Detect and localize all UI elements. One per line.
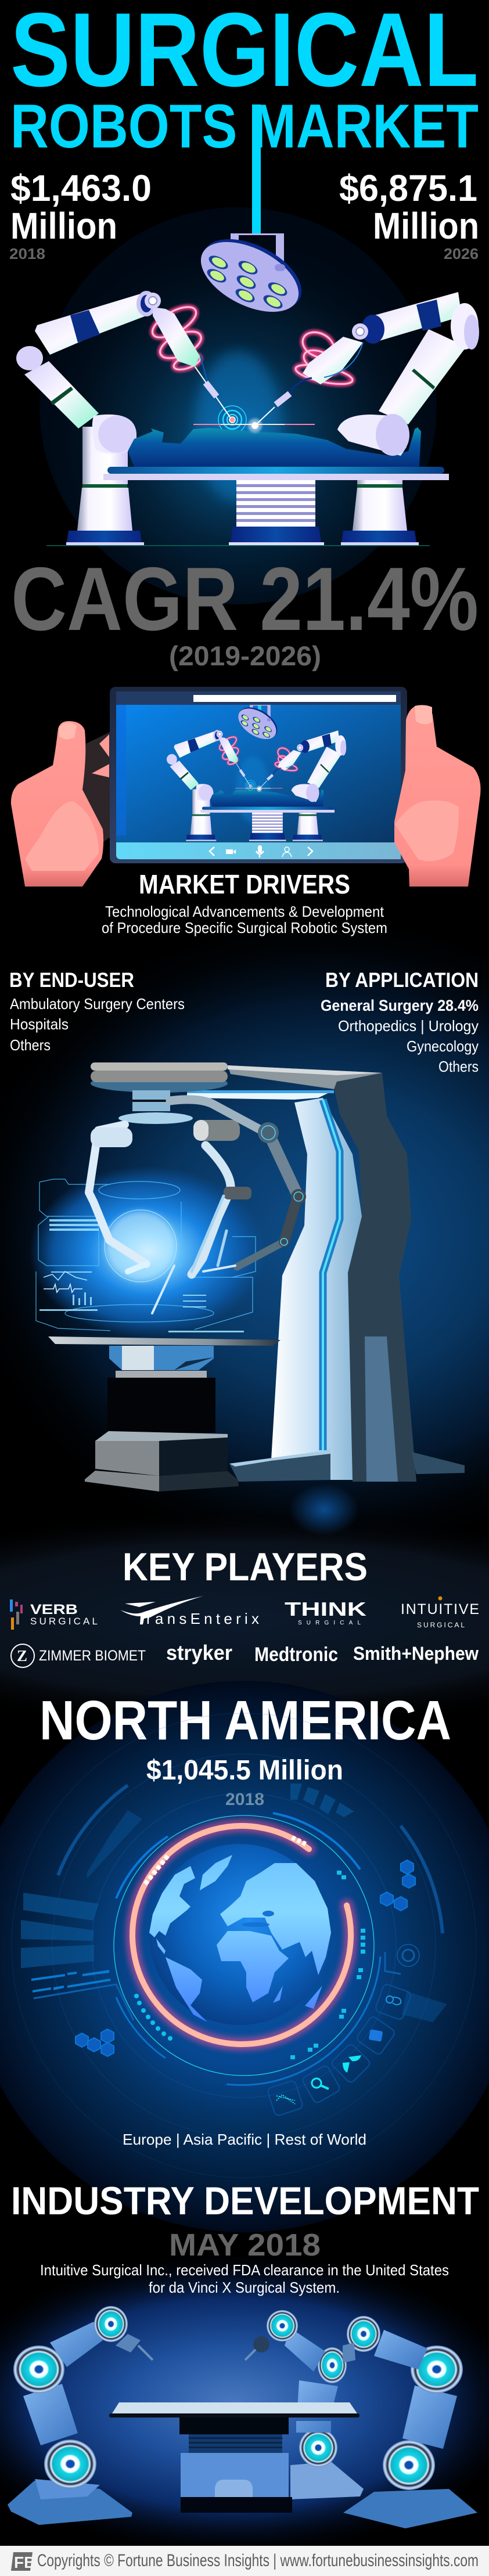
floor glow: [289, 1483, 359, 1536]
right tool: [255, 323, 368, 426]
panel: by end-user: BY END-USER: [9, 969, 134, 992]
footer logo: FB: [14, 2553, 35, 2571]
stat: 2026 market size: Million: [373, 205, 479, 247]
icon: lungs: [330, 2043, 371, 2084]
left hand: [11, 721, 109, 887]
robot arm B: [192, 1120, 251, 1274]
rear robot: [245, 2310, 364, 2499]
logo: Verb Surgical: [10, 1599, 98, 1630]
robot arm C: [152, 1100, 306, 1313]
illustration: robot arms around table: [8, 2306, 477, 2528]
hexagon cluster bottom left: [75, 2029, 114, 2056]
lamp stem: [252, 105, 261, 233]
right robot: [343, 2316, 477, 2528]
illustration: surgical robot machine: [29, 1062, 465, 1536]
icon: medical kit: [355, 2015, 396, 2056]
left pink rings: [148, 301, 205, 373]
right hand: [394, 705, 481, 887]
operating table: [109, 2402, 359, 2513]
top disk: [91, 1062, 228, 1124]
logo: TransEnterix: [120, 1596, 259, 1627]
logo: Zimmer Biomet: Z: [17, 1647, 27, 1665]
radar icon: [385, 1944, 419, 1974]
text: market driver description: of Procedure Specific Surgical Robotic System: [102, 919, 387, 936]
right shoulder: [337, 414, 409, 456]
illustration: tablet held by hands: [11, 687, 480, 887]
icon: magnifier: [301, 2065, 341, 2104]
pedestal: [107, 1346, 215, 1433]
dark fingers: [82, 732, 437, 842]
panel: by application: [321, 969, 479, 1075]
tablet: [110, 687, 407, 863]
hud rings: [12, 1713, 476, 2178]
stat: 2018 market size: 2018: [9, 245, 45, 262]
CAGR: (2019-2026): [169, 640, 321, 671]
neon ring: [132, 1826, 351, 2044]
logo: Think Surgical: [285, 1598, 366, 1626]
base block: [85, 1431, 239, 1491]
left robot: [8, 2306, 153, 2525]
panel: by application: General Surgery 28.4%: [321, 997, 479, 1014]
stat: 2018 market size: $1,463.0: [10, 167, 152, 209]
logo: Zimmer Biomet: [11, 1644, 146, 1667]
patient: [128, 427, 421, 467]
logo: Think Surgical: SURGICAL: [298, 1620, 361, 1626]
floor line: [46, 545, 430, 546]
surgical lamp: [190, 225, 313, 326]
right pink rings: [294, 327, 354, 388]
hexagon cluster top right: [380, 1860, 415, 1911]
stat: 2018 market size: Million: [10, 205, 117, 247]
logo: Verb Surgical: VERB: [30, 1602, 78, 1617]
machine table: [48, 1336, 281, 1346]
mini stem: [258, 705, 261, 720]
title: [10, 0, 479, 161]
top beam: [187, 1065, 382, 1100]
logo: Stryker: stryker: [166, 1641, 232, 1665]
stat: 2018 market size: [9, 167, 152, 262]
panel: by end-user: Ambulatory Surgery Centers: [10, 995, 185, 1013]
mini robot scene: [167, 701, 346, 841]
stat: north america value: [146, 1755, 343, 1809]
stat: 2026 market size: 2026: [444, 245, 479, 262]
logo: Intuitive Surgical: INTUITIVE: [401, 1601, 479, 1617]
illustration: globe hud: [12, 1713, 476, 2178]
text: industry development description: for da Vinci X Surgical System.: [149, 2279, 340, 2296]
light strip: [323, 1100, 340, 1450]
text: industry development description: Intuitive Surgical Inc., received FDA clearance in the United States: [40, 2261, 449, 2279]
text: industry development description: [40, 2261, 449, 2296]
date: MAY 2018: [169, 2228, 321, 2262]
side plate: [365, 1336, 398, 1482]
tower front: [271, 1098, 362, 1480]
logo: Smith+Nephew: Smith+Nephew: [353, 1643, 479, 1664]
panel: by end-user: Hospitals: [10, 1015, 69, 1033]
logo: TransEnterix: ransEnterix: [146, 1610, 259, 1627]
panel: by application: Gynecology: [407, 1037, 479, 1055]
panel: by application: Others: [438, 1058, 479, 1075]
tower back: [331, 1073, 416, 1482]
panel: by application: Orthopedics | Urology: [338, 1017, 479, 1035]
tablet controls: [210, 845, 312, 858]
logo: Verb Surgical: SURGICAL: [30, 1616, 98, 1627]
stat: north america value: $1,045.5 Million: [146, 1755, 343, 1786]
right foot: [412, 1452, 465, 1474]
left tool: [145, 293, 232, 420]
text: other regions: Europe | Asia Pacific | Rest of World: [123, 2131, 366, 2148]
logo: Zimmer Biomet: ZIMMER BIOMET: [39, 1648, 146, 1664]
hud dots: [134, 1871, 365, 2059]
globe: [149, 1844, 331, 2025]
stat: 2026 market size: [339, 167, 479, 262]
heading: key players: KEY PLAYERS: [123, 1545, 368, 1589]
stat: north america value: 2018: [225, 1790, 264, 1809]
logo: Intuitive Surgical: [401, 1597, 479, 1629]
right robot arm: [341, 292, 479, 545]
operating table: [103, 467, 449, 545]
panel: by end-user: Others: [10, 1036, 51, 1054]
left foot: [229, 1450, 330, 1482]
heading: market drivers: MARKET DRIVERS: [139, 869, 350, 899]
footer: [0, 2546, 489, 2576]
logo: Intuitive Surgical: SURGICAL: [417, 1621, 465, 1629]
left robot arm: [16, 291, 156, 545]
text: market driver description: [102, 903, 387, 936]
logo: Medtronic: Medtronic: [254, 1644, 338, 1666]
illustration: robotic surgery scene: [16, 225, 479, 546]
stat: 2026 market size: $6,875.1: [339, 167, 477, 209]
hologram: [29, 1166, 267, 1338]
hud lines: [31, 1970, 134, 2020]
spark: [193, 417, 315, 433]
icon: stethoscope: [375, 1983, 412, 2020]
icon: dna: [267, 2080, 304, 2117]
robot arm A: [89, 1125, 146, 1271]
target glow: [195, 351, 282, 502]
hud data blocks: [21, 1784, 447, 2022]
logo: Think Surgical: THINK: [285, 1598, 366, 1620]
panel: by end-user: [9, 969, 185, 1054]
text: market driver description: Technological Advancements & Development: [105, 903, 384, 920]
